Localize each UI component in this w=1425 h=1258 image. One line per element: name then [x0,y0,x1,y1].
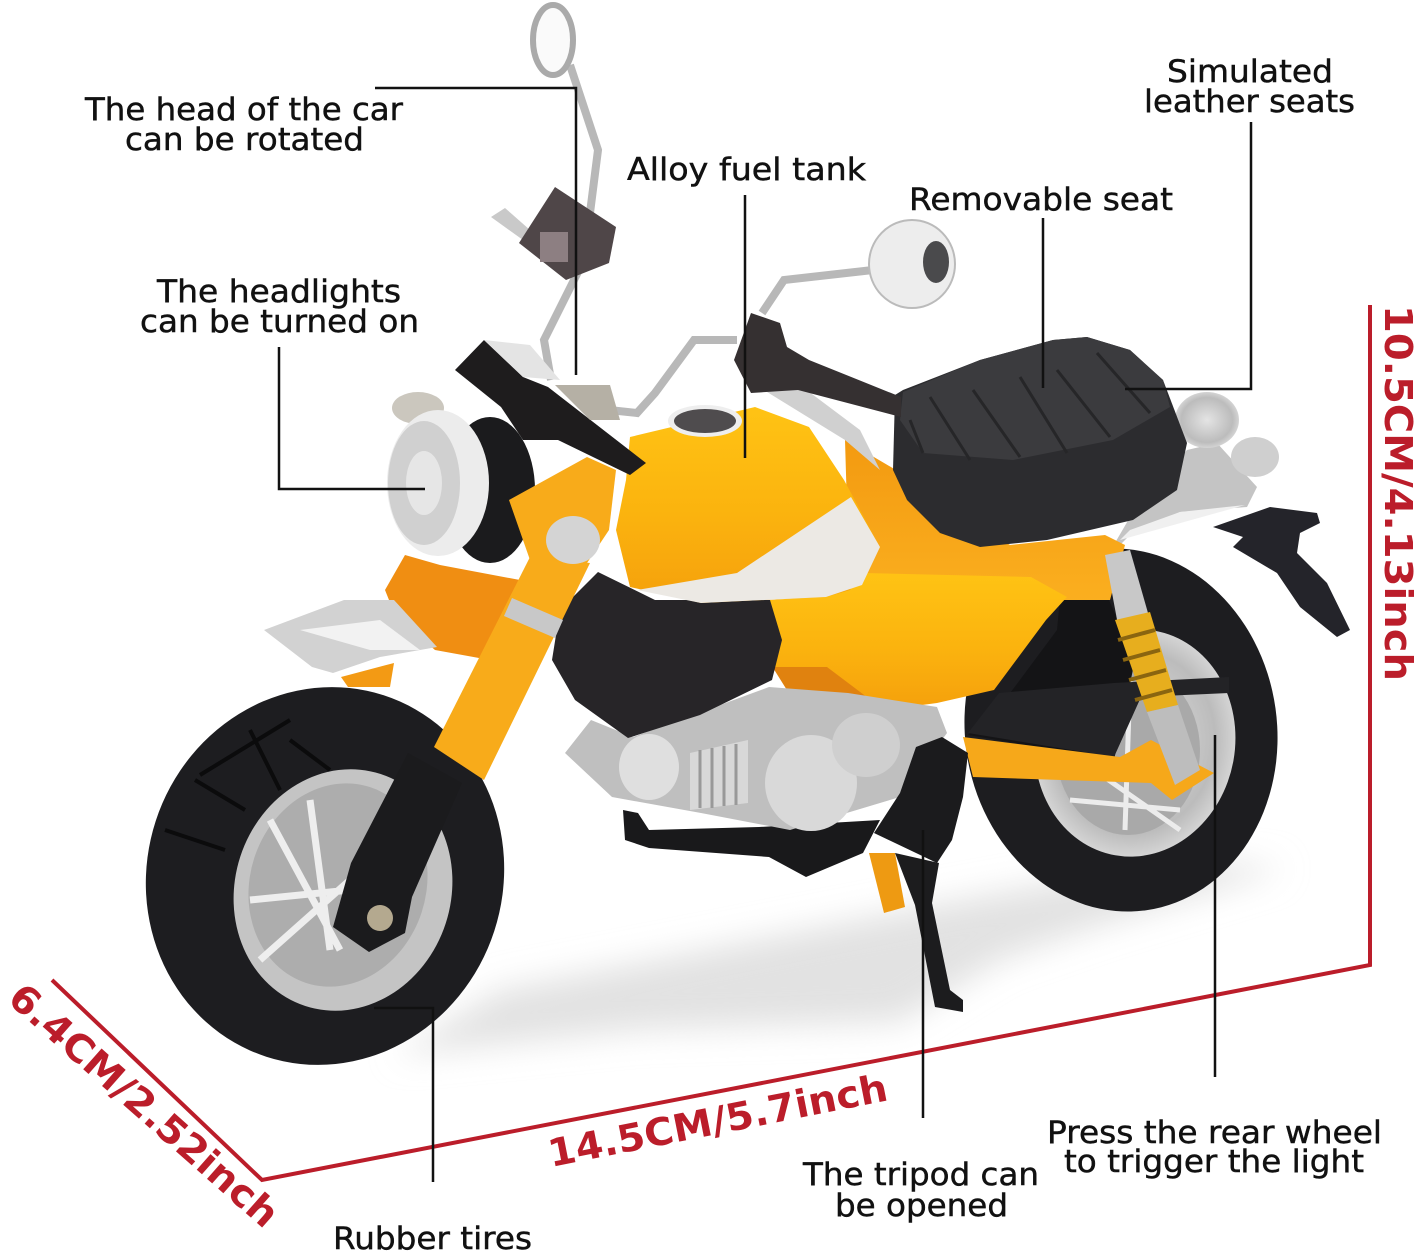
rear shock [1105,550,1200,785]
label: headlights: The headlights [156,274,401,310]
engine [565,687,947,831]
handlebars [544,65,873,413]
left mirror [533,5,573,75]
motorcycle [97,5,1350,1112]
right grip [734,313,901,417]
label: rubber tires: Rubber tires [333,1221,532,1257]
right mirror [869,220,955,308]
label: rear wheel light: Press the rear wheel [1047,1115,1382,1151]
label: rear wheel light [1047,1115,1382,1180]
label: head rotates: The head of the car [84,92,403,128]
dimension: width: 6.4CM/2.52inch [0,975,288,1236]
label: headlights: can be turned on [140,304,419,340]
upper frame [845,440,1125,610]
rear seat support strip [759,385,880,470]
chain guard [968,677,1229,757]
orange stand tab [869,853,905,913]
dimension: length: 14.5CM/5.7inch [544,1066,891,1176]
foot lever [874,737,968,863]
label: tripod: The tripod can [802,1157,1039,1193]
front fork [333,557,590,952]
label: headlights [140,274,419,340]
rear flap [1213,507,1350,637]
rear rack and lights [1105,392,1279,560]
clutch lever [491,187,616,280]
black battery box [552,572,782,738]
swing arm [963,737,1214,800]
rear wheel [941,528,1301,932]
kick arm behind pedal [623,810,880,877]
seat [893,337,1187,547]
label: removable seat: Removable seat [909,182,1173,218]
label: rear wheel light: to trigger the light [1064,1144,1364,1180]
dark area behind cover [968,577,1135,760]
label: simulated leather seats: leather seats [1144,84,1355,120]
label: simulated leather seats: Simulated [1167,54,1333,90]
dimension: height: 10.5CM/4.13inch [1376,305,1420,681]
label: head rotates: can be rotated [125,122,364,158]
headlight and dash [387,340,646,564]
label: alloy fuel tank: Alloy fuel tank [627,152,866,188]
dimension lines [52,305,1370,1180]
label: simulated leather seats [1144,54,1355,120]
lower orange engine mount [765,655,885,712]
label: tripod [802,1157,1039,1224]
fuel tank [616,405,880,603]
kick stand [895,853,963,1012]
label: tripod: be opened [835,1188,1008,1224]
label: head rotates [84,92,403,158]
front wheel [97,640,553,1112]
leader lines [279,88,1251,1182]
ground shadow [395,860,1285,1055]
orange neck [385,555,520,660]
side cover [769,573,1067,710]
front fender [264,600,437,687]
